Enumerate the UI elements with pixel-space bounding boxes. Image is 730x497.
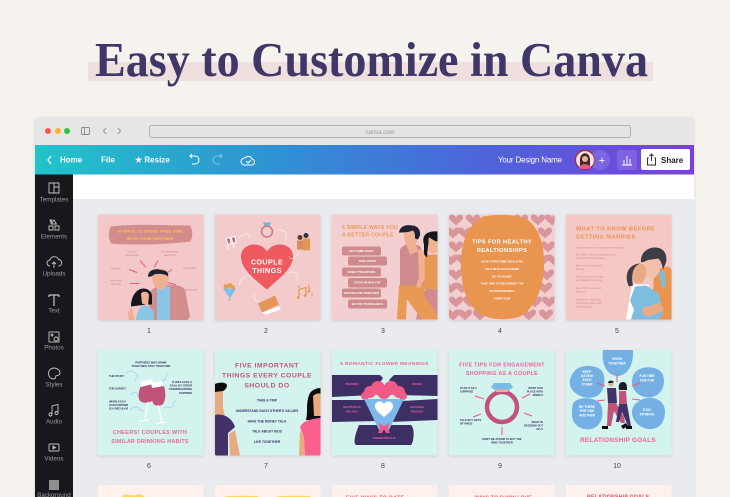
card 6: cheers couples: WHEN EACH [109, 400, 126, 404]
card 8: flower meanings: 5 ROMANTIC FLOWER MEANINGS [340, 361, 429, 367]
card 11 partial [98, 485, 204, 497]
card 8: flower meanings: ANEMONIFOLIA [372, 436, 396, 440]
card 4: tips for healthy relationships: REALTIONSHIPS [477, 248, 527, 254]
card 7: five important things: HAVE THE MONEY TALK [248, 420, 287, 424]
card 1: 10 ways to spend free time: amusement [125, 253, 139, 257]
card 9: five tips engagement [449, 350, 554, 456]
card 10: relationship goals: STAY [643, 408, 652, 412]
toolbar left menu: ★ Resize [135, 156, 170, 164]
card 6: cheers couples: IT WAS ALSO A [172, 380, 192, 384]
card 12 partial [215, 485, 320, 497]
bouquet icon [223, 288, 236, 298]
ring [487, 383, 517, 422]
glasses icon [226, 236, 236, 250]
card 6: cheers couples: TOGETHER, STAY TOGETHER [132, 364, 170, 368]
page number 3: 3 [381, 328, 385, 335]
sidebar labels: Uploads [42, 270, 66, 278]
card 10: relationship goals: FUN TIME [639, 374, 655, 378]
card 1: 10 ways to spend free time: Date list [111, 266, 121, 270]
card 4: tips for healthy relationships: BE PLEASANT [492, 274, 512, 278]
card 10: relationship goals: INTIMATE [640, 412, 654, 416]
card 6: cheers couples: THE STUDY [109, 374, 124, 378]
card 6: cheers couples: SIMILAR DRINKING HABITS [111, 439, 189, 445]
card 5: what to know before getting married: Be aware of the expectations you've [576, 254, 617, 256]
background pattern icon [49, 480, 59, 490]
page number 7: 7 [264, 463, 268, 470]
card 5: what to know before getting married: Know everyone's friends [576, 276, 604, 278]
card 8: flower meanings: ROSES [412, 382, 422, 386]
undo redo cloud icons [190, 154, 255, 165]
card 10: relationship goals: DATING [581, 374, 594, 378]
card 1: 10 ways to spend free time: Be honest with [161, 250, 179, 254]
card 9: five tips engagement: RING TOGETHER [491, 440, 513, 444]
share button [641, 149, 690, 170]
card 10: relationship goals: GROW [612, 357, 622, 361]
window traffic lights [45, 128, 70, 134]
card 6: cheers couples: THE SURVEY [109, 386, 126, 390]
card 5: what to know before getting married: WHAT TO KNOW BEFORE [576, 226, 655, 232]
toolbar left menu [48, 156, 170, 164]
card 7: five important things: SHOULD DO [244, 382, 290, 390]
card 5: what to know before getting married: GETTING MARRIED [576, 234, 636, 240]
card 10: relationship goals: TOGETHER [608, 362, 627, 366]
card 8: flower meanings: ROSSES [411, 410, 423, 414]
card 3: 6 simple ways: BE FUN TO RESEARCH [352, 302, 383, 306]
card 7: five important things: TALK ABOUT KIDS [252, 430, 283, 434]
page number 10: 10 [613, 463, 621, 470]
browser nav icons [82, 128, 120, 134]
card 5: what to know before getting married: and obligations you can [576, 279, 603, 282]
card 5: what to know before getting married: Know whether or not marry to someone you [576, 246, 625, 250]
card 10: relationship goals: OTHER [581, 382, 593, 386]
card 7: five important things: FIVE IMPORTANT [235, 362, 299, 370]
address bar [150, 126, 630, 138]
card 14 partial [449, 485, 554, 497]
card 4: tips for healthy relationships: TIPS FOR HEALTHY [472, 240, 532, 246]
card 1: 10 ways to spend free time: Date nights [183, 266, 197, 270]
card 9: five tips engagement: JEWELS [532, 393, 543, 397]
canva toolbar [35, 145, 694, 174]
card 7: five important things [215, 350, 321, 456]
editor canvas [73, 199, 694, 497]
card 2: couple things: COUPLE [251, 258, 283, 266]
sidebar labels: Audio [46, 418, 63, 426]
walking couple [397, 225, 441, 320]
card 9: five tips engagement: SHOPPING AS A COUPLE [466, 371, 538, 377]
sidebar [35, 174, 73, 497]
card 4: tips for healthy relationships: TALK WITH EACH OTHER [485, 267, 519, 271]
woman figure [299, 388, 321, 456]
page number 1: 1 [147, 328, 151, 335]
card 6: cheers couples: CHEERS! COUPLES WITH [113, 430, 187, 436]
sidebar labels: Photos [44, 344, 64, 352]
toolbar left menu: File [101, 156, 115, 164]
title: Easy to Customize in Canva [95, 32, 648, 87]
card 8: flower meanings: PEONIES [345, 382, 359, 386]
add button [590, 150, 610, 170]
card 5: what to know before getting married: Every other marriage's [576, 287, 602, 290]
sidebar labels: Text [48, 308, 60, 314]
page number 5: 5 [615, 328, 619, 335]
card 9: five tips engagement: PLACE WITH [527, 390, 543, 394]
card 7: five important things: LIVE TOGETHER [254, 440, 281, 444]
card 4: tips for healthy relationships: START NOW [494, 296, 511, 300]
card 1: 10 ways to spend free time: each other [164, 253, 176, 257]
card 5: what to know before getting married: lacking [576, 268, 584, 271]
card 6: cheers couples: CONVERSATIONS [169, 387, 192, 391]
card 9: five tips engagement: OF RINGS [460, 422, 473, 426]
card 9: five tips engagement: START OUR [528, 386, 543, 390]
card 8: flower meanings: MATTHIOLA [343, 405, 362, 409]
card 5: what to know before getting married: your family make good [576, 302, 602, 305]
tickets icon [258, 296, 279, 312]
page number 6: 6 [147, 463, 151, 470]
card 4: tips for healthy relationships: TAKE TIME TO RECOGNIZE THE [480, 282, 524, 286]
page number 2: 2 [264, 328, 268, 335]
card 13 partial [332, 485, 438, 497]
card 9: five tips engagement: OF IT [536, 427, 543, 431]
card 9: five tips engagement: TALK BUY GIFTS [460, 418, 481, 422]
card 1: 10 ways to spend free time: Go to an [127, 250, 138, 254]
card 6: cheers couples: HAS PARTNER [109, 403, 128, 407]
card 6: cheers couples: IS A REGULAR [109, 406, 128, 410]
card 5: what to know before getting married: Why aren't dealing your [576, 264, 602, 268]
card 10: relationship goals: ANOTHER [579, 414, 596, 418]
add button: + [599, 155, 605, 167]
card 7: five important things: UNDERSTAND EACH OTHER'S VALUES [236, 409, 299, 413]
sidebar labels: Elements [41, 234, 67, 240]
card 4: tips for healthy relationships: BE RESPONSIBLE [490, 289, 514, 293]
card 3: 6 simple ways [332, 214, 441, 320]
toolbar left menu: Home [60, 156, 83, 164]
card 3: 6 simple ways: FAMILY TRADITIONS [348, 270, 376, 274]
bouquet [361, 381, 407, 433]
card 6: cheers couples: PARTNERS WHO DRINK [135, 360, 167, 364]
card 2: couple things: THINGS [252, 266, 282, 275]
card 10: relationship goals [566, 350, 672, 456]
card 10: relationship goals: FOR FUN [640, 378, 655, 382]
sidebar labels: Styles [45, 382, 63, 388]
card 6: cheers couples: PARTNER [179, 391, 192, 395]
card 10: relationship goals: KEEP [583, 370, 592, 374]
sidebar labels: Videos [44, 456, 64, 462]
stats button [617, 150, 637, 170]
walking couple [602, 381, 632, 429]
card 3: 6 simple ways: ROUTES FOR TOGETHER [344, 291, 379, 295]
card 10: relationship goals: BE THERE [579, 405, 595, 409]
card 15 partial [566, 485, 672, 497]
editor top white bar [73, 174, 694, 199]
man figure [215, 383, 240, 456]
card 10: relationship goals: RELATIONSHIP GOALS [580, 437, 656, 444]
card 7: five important things: THINGS EVERY COUPLE [222, 372, 312, 380]
card 9: five tips engagement: DECIDING OUT [524, 424, 543, 428]
card 9: five tips engagement: DON'T BE AFRAID TO BUY THE [482, 437, 522, 441]
card 2: couple things [215, 214, 320, 320]
sidebar labels: Templates [40, 196, 68, 204]
page number 9: 9 [498, 463, 502, 470]
card 3: 6 simple ways: TAKE STOCK [359, 259, 376, 263]
share button: Share [661, 156, 684, 165]
card 9: five tips engagement: SURPRISE [460, 390, 474, 394]
sidebar icons [47, 183, 62, 451]
card 1: 10 ways to spend free time: Stay honest [183, 288, 197, 292]
card 9: five tips engagement: PLAN IT AS A [460, 386, 477, 390]
card 3: 6 simple ways: GET HOME EARLY [349, 249, 374, 253]
card 8: flower meanings [332, 350, 438, 456]
card 10: relationship goals: FOR ONE [580, 409, 594, 413]
card 1: 10 ways to spend free time [98, 214, 204, 320]
card 8: flower meanings: GEORGIA [410, 405, 425, 409]
card 5: what to know before getting married: finances [576, 290, 586, 294]
card 9: five tips engagement: FIVE TIPS FOR ENGAGEMENT [459, 362, 545, 368]
card 1: 10 ways to spend free time: their day [111, 282, 122, 286]
card 5: what to know before getting married [566, 214, 672, 320]
browser window [35, 117, 694, 497]
card 1: 10 ways to spend free time: 10 WAYS TO SPEND FREE TIME [117, 228, 183, 234]
card 6: cheers couples [98, 350, 204, 456]
card 4: tips for healthy relationships: HAVE EVERYTHING REALISTIC [481, 260, 523, 264]
card 5: what to know before getting married: Important is secondary [576, 298, 602, 302]
address bar: canva.com [365, 130, 395, 136]
music icon [299, 284, 309, 298]
design name: Your Design Name [498, 156, 563, 164]
card 7: five important things: TAKE A TRIP [257, 398, 278, 402]
card 8: flower meanings: INCANA [346, 410, 359, 414]
card 3: 6 simple ways: STAYS IN HEALTHY [354, 280, 381, 284]
card 1: 10 ways to spend free time: WITH YOUR PARTNER [127, 236, 173, 241]
card 3: 6 simple ways: A BETTER COUPLE [342, 232, 394, 238]
card 5: what to know before getting married: realized with the marriage [576, 257, 605, 260]
wine glasses [139, 379, 166, 424]
card 10: relationship goals: EACH [582, 378, 592, 382]
card 4: tips for healthy relationships [444, 214, 561, 320]
wedding couple [626, 248, 672, 320]
card 5: what to know before getting married: understanding [576, 306, 592, 308]
page number 8: 8 [381, 463, 385, 470]
card 6: cheers couples: GOAL BY OTHER [170, 384, 192, 388]
couple icon [298, 235, 302, 240]
card 9: five tips engagement: RIGHT IN [532, 420, 543, 424]
blue blobs [570, 350, 665, 429]
ring icon [262, 226, 272, 237]
page number 4: 4 [498, 328, 502, 335]
card 3: 6 simple ways: 6 SIMPLE WAYS YOU [342, 225, 398, 231]
navy bands [332, 375, 438, 445]
avatar [576, 150, 594, 170]
sidebar labels [37, 196, 71, 497]
card 1: 10 ways to spend free time: Ask about [110, 278, 122, 282]
